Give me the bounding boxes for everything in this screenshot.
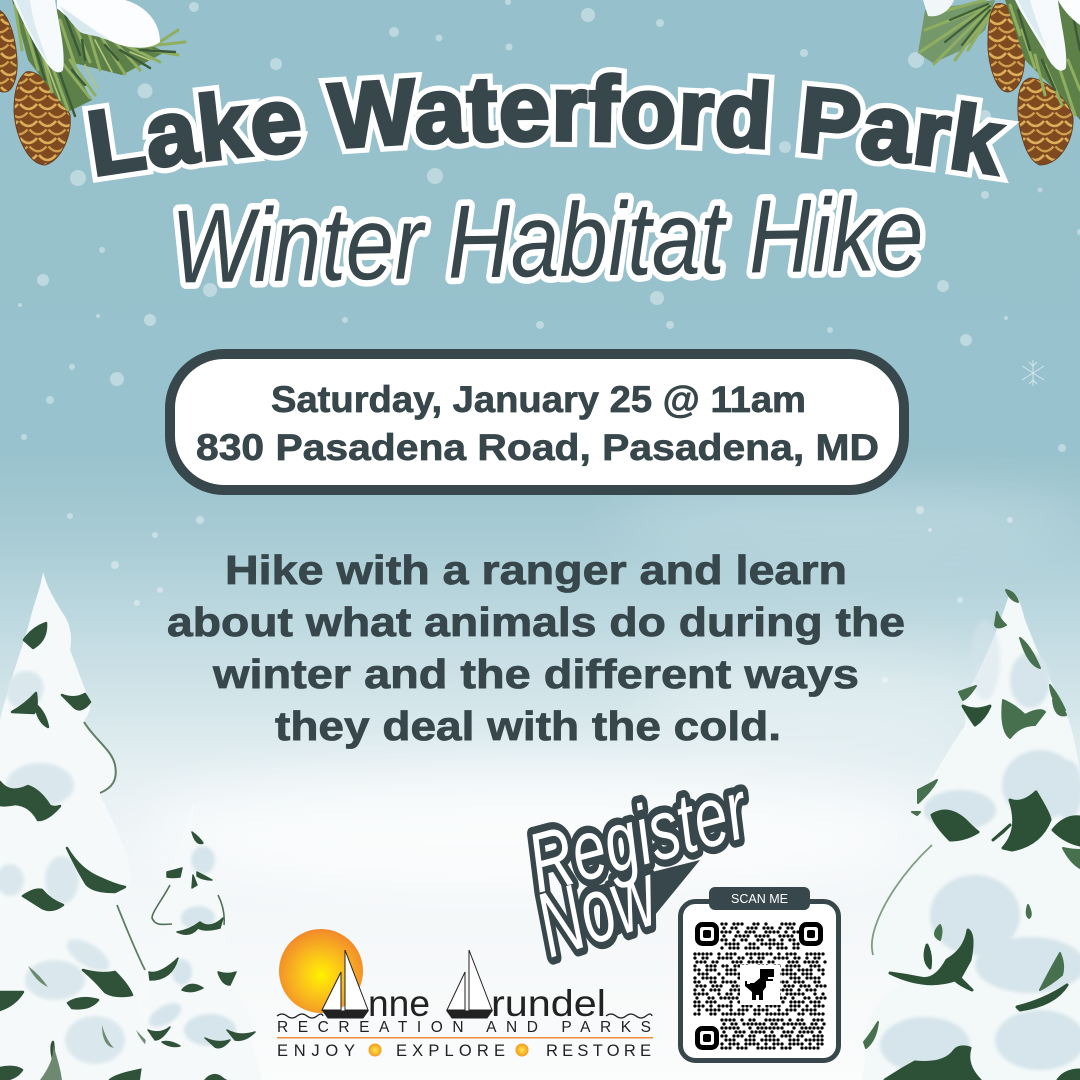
snow (1015, 0, 1066, 71)
rule (277, 1037, 653, 1038)
icon: pine cone rear (988, 3, 1024, 92)
text block: description: winter and the different ways (212, 651, 859, 697)
logo wordmark: rundel (491, 983, 606, 1024)
needles: inner cluster (1005, 0, 1080, 120)
needles: outer fan (918, 0, 995, 64)
call to action: Register Now: Now (525, 842, 672, 977)
snow (13, 0, 64, 72)
text block: description: Hike with a ranger and learn (225, 547, 847, 593)
waves (277, 1014, 652, 1018)
date text: Saturday, January 25 @ 11am (271, 379, 806, 420)
icon: faint snowflake (619, 232, 1044, 386)
pine branch: top left (0, 0, 185, 165)
icon: pine cone front (14, 72, 70, 165)
tab: scan me (709, 887, 810, 910)
QR code (695, 924, 826, 1048)
QR card (680, 887, 838, 1060)
tree: left large (0, 572, 168, 1080)
falling snow dots (18, 0, 1080, 683)
call to action: Register Now: Register (518, 762, 759, 910)
logo tagline (277, 1042, 651, 1060)
icon: dinosaur (745, 969, 774, 1000)
call to action: Register Now (518, 762, 759, 977)
needles (12, 0, 185, 116)
tree: left small (140, 802, 262, 1080)
text block: description (167, 547, 905, 749)
icon: sailboat two (447, 950, 492, 1018)
logo tagline: RESTORE (546, 1042, 651, 1060)
tree: right large (862, 590, 1080, 1080)
logo wordmark: nne (368, 983, 430, 1024)
call to action: Register Now: Register (518, 762, 759, 910)
logo tagline: ENJOY (277, 1042, 355, 1060)
finder squares (698, 924, 820, 1048)
text block: description: they deal with the cold. (275, 703, 781, 749)
logo subtitle: RECREATION AND PARKS (277, 1019, 651, 1036)
tab: scan me: SCAN ME (731, 892, 788, 906)
location text: 830 Pasadena Road, Pasadena, MD (196, 427, 879, 468)
icon: pine cone front (1018, 78, 1073, 165)
icon: sun (279, 929, 363, 1013)
title: Lake Waterford Park: Lake Waterford Park (82, 67, 1020, 184)
text block: description: about what animals do during the (167, 599, 905, 645)
subtitle: Winter Habitat Hike: Winter Habitat Hike (171, 176, 924, 306)
icon: sailboat one (322, 950, 368, 1018)
icon: pine cone rear (0, 9, 17, 92)
logo tagline: EXPLORE (396, 1042, 505, 1060)
title: Lake Waterford Park: Lake Waterford Park (88, 72, 1008, 177)
logo: Anne Arundel Recreation and Parks (277, 929, 653, 1060)
panel: date and location (170, 354, 904, 490)
subtitle: Winter Habitat Hike: Winter Habitat Hike (171, 176, 924, 306)
pine branch: top right (918, 0, 1080, 165)
call to action: Register Now: Now (525, 842, 672, 977)
logo wordmark (368, 983, 606, 1024)
